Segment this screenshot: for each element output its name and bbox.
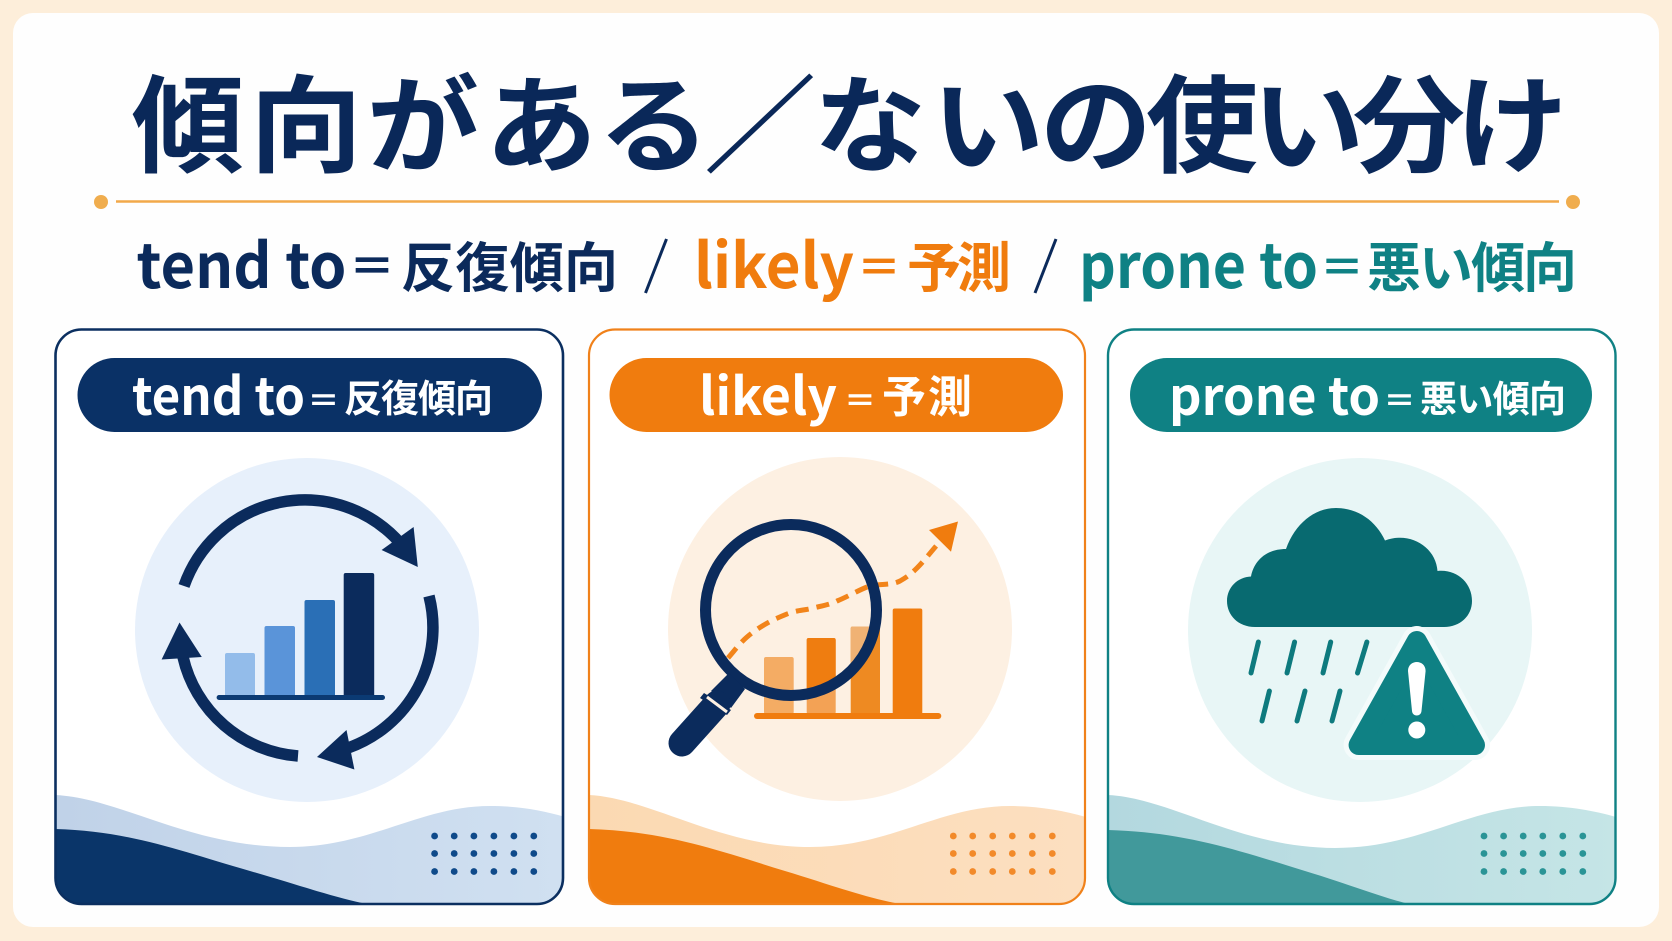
slash separator 1 (646, 239, 666, 293)
icon: magnifying glass (682, 524, 876, 743)
heading pill (610, 355, 1063, 432)
panel: tend to (55, 330, 565, 906)
title divider (94, 195, 1580, 209)
bottom waves (1108, 795, 1616, 906)
heading pill: 予測 (882, 361, 972, 425)
bar chart: forecast bars (754, 608, 941, 719)
bottom waves (589, 795, 1086, 906)
heading pill: prone to (1169, 355, 1380, 430)
slash separator 2 (1035, 239, 1056, 293)
summary: likely: likely (694, 216, 854, 306)
summary: prone to: ＝ (1320, 232, 1364, 296)
dot grid (1481, 833, 1586, 875)
icon backdrop circle (1188, 458, 1532, 802)
dashed trend arrow (728, 522, 958, 658)
card background (589, 330, 1085, 904)
heading pill (78, 355, 542, 432)
summary: tend to: ＝ (349, 231, 395, 297)
card border (589, 330, 1085, 904)
icon backdrop circle (668, 457, 1012, 801)
summary: tend to (136, 216, 618, 306)
bar chart: rising bars (217, 573, 385, 700)
icon: warning triangle (1359, 641, 1475, 745)
summary: tend to: tend to (136, 216, 346, 306)
summary: likely: 予測 (907, 224, 1011, 303)
dot grid (431, 833, 537, 875)
bottom waves (55, 795, 565, 906)
card border (1108, 330, 1616, 904)
panel: likely (589, 330, 1086, 906)
summary: likely (694, 216, 1011, 306)
heading pill: tend to (132, 355, 305, 430)
icon: repeating cycle arrows (162, 500, 433, 770)
heading pill: likely (699, 355, 837, 430)
icon backdrop circle (135, 458, 479, 802)
summary: tend to: 反復傾向 (401, 224, 618, 303)
summary: likely: ＝ (857, 232, 901, 296)
summary: prone to: prone to (1079, 216, 1318, 306)
card background (1108, 330, 1616, 904)
heading pill: 悪い傾向 (1420, 369, 1566, 423)
heading pill: ＝ (844, 376, 876, 422)
dot grid (950, 833, 1056, 875)
card border (56, 330, 563, 904)
panel: prone to (1108, 330, 1616, 906)
heading pill: ＝ (1383, 376, 1416, 422)
heading pill (1130, 355, 1592, 432)
title: 傾向がある／ないの使い分け (131, 42, 1568, 195)
summary: prone to (1079, 216, 1577, 306)
icon: rain cloud (1227, 508, 1472, 721)
subtitle summary line (136, 216, 1577, 306)
card background (56, 330, 563, 904)
heading pill: 反復傾向 (344, 368, 493, 423)
heading pill: ＝ (307, 376, 340, 422)
summary: prone to: 悪い傾向 (1367, 224, 1577, 303)
